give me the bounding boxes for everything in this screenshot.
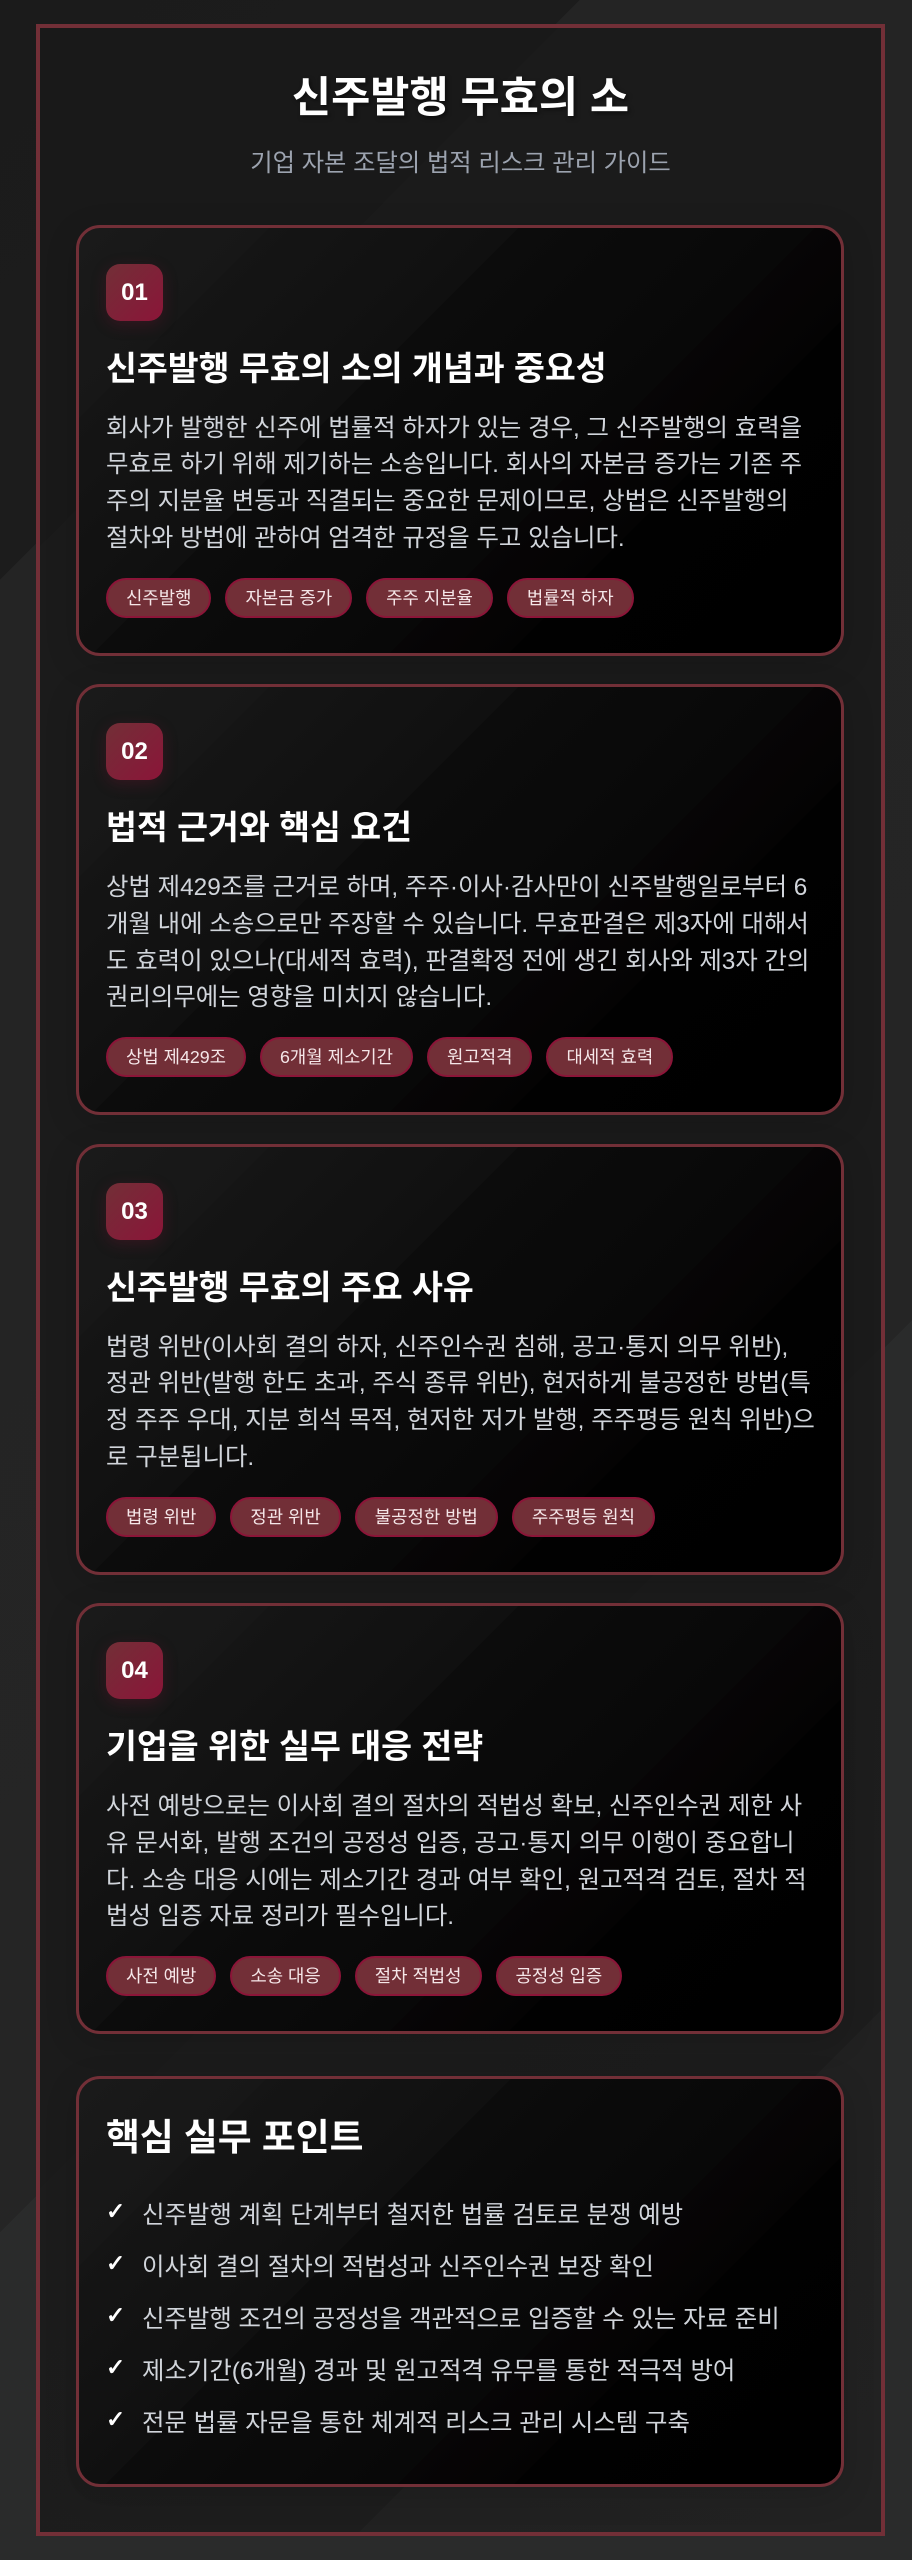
subtitle: 기업 자본 조달의 법적 리스크 관리 가이드 [250,150,671,177]
point 3 [106,2303,780,2333]
body text 03: 법령 위반(이사회 결의 하자, 신주인수권 침해, 공고·통지 의무 위반), [106,1334,788,1360]
body text 01: 회사가 발행한 신주에 법률적 하자가 있는 경우, 그 신주발행의 효력을 [106,414,802,442]
body text 01: 주의 지분율 변동과 직결되는 중요한 문제이므로, 상법은 신주발행의 [106,488,789,515]
tags 02: 대세적 효력 [566,1047,653,1067]
panel: key practice points: ✓ [106,2251,125,2277]
body text 01: 무효로 하기 위해 제기하는 소송입니다. 회사의 자본금 증가는 기존 주 [106,451,802,478]
tags 01 [106,578,634,618]
tags 03: 주주평등 원칙 [532,1506,635,1526]
tags 01: 법률적 하자 [527,588,614,608]
tags 04 [106,1956,622,1996]
badge 01: 01 [121,278,148,306]
body text 04 [106,1793,807,1930]
body text 04: 사전 예방으로는 이사회 결의 절차의 적법성 확보, 신주인수권 제한 사 [106,1793,802,1820]
panel: key practice points: ✓ [106,2199,125,2225]
body text 02: 도 효력이 있으나(대세적 효력), 판결확정 전에 생긴 회사와 제3자 간의 [106,948,809,975]
tags 03: 불공정한 방법 [375,1506,478,1526]
point 2 [106,2251,654,2281]
tags 03: 법령 위반 [126,1506,196,1526]
body text 03: 로 구분됩니다. [106,1444,254,1471]
panel: key practice points: 전문 법률 자문을 통한 체계적 리스크 관리 시스템 구축 [142,2410,690,2437]
badge 04: 04 [121,1657,148,1684]
panel: section 03 grounds [76,1144,844,1574]
tags 02: 원고적격 [447,1047,512,1067]
tags 04: 절차 적법성 [375,1966,462,1986]
body text 02 [106,874,809,1011]
badge 02 [106,723,163,780]
body text 01: 절차와 방법에 관하여 엄격한 규정을 두고 있습니다. [106,525,625,552]
summary heading: 핵심 실무 포인트 [106,2117,363,2158]
tags 02: 6개월 제소기간 [280,1047,393,1067]
panel: section 04 strategy [76,1603,844,2034]
body text 04: 유 문서화, 발행 조건의 공정성 입증, 공고·통지 의무 이행이 중요합니 [106,1830,795,1857]
heading 04: 기업을 위한 실무 대응 전략 [106,1729,483,1766]
badge 02: 02 [121,738,148,765]
heading 02: 법적 근거와 핵심 요건 [106,810,412,847]
body text 04: 다. 소송 대응 시에는 제소기간 경과 여부 확인, 원고적격 검토, 절차 적 [106,1867,807,1894]
badge 01 [106,264,163,320]
panel: key practice points: ✓ [106,2355,125,2381]
tags 04: 소송 대응 [250,1966,321,1986]
panel: key practice points: 제소기간(6개월) 경과 및 원고적격 유무를 통한 적극적 방어 [142,2358,735,2385]
title: 신주발행 무효의 소 [292,74,629,122]
badge 03 [106,1182,163,1240]
heading 01: 신주발행 무효의 소의 개념과 중요성 [106,350,607,388]
panel: section 02 legal basis [76,684,844,1115]
body text 02: 상법 제429조를 근거로 하며, 주주·이사·감사만이 신주발행일로부터 6 [106,874,807,901]
point 1 [106,2199,683,2229]
tags 04: 사전 예방 [126,1966,196,1986]
body text 01 [106,414,802,552]
tags 01: 자본금 증가 [245,588,332,608]
tags 01: 주주 지분율 [386,588,473,608]
panel: section 01 concept [76,224,844,656]
body text 04: 법성 입증 자료 정리가 필수입니다. [106,1903,454,1930]
body text 03: 정관 위반(발행 한도 초과, 주식 종류 위반), 현저하게 불공정한 방법(특 [106,1370,811,1397]
badge 03: 03 [121,1198,148,1224]
panel: key practice points: ✓ [106,2303,125,2329]
tags 04: 공정성 입증 [516,1966,602,1986]
tags 03 [106,1497,655,1537]
point 5 [106,2407,690,2437]
body text 02: 권리의무에는 영향을 미치지 않습니다. [106,984,492,1011]
panel: key practice points: 신주발행 계획 단계부터 철저한 법률 검토로 분쟁 예방 [142,2202,683,2229]
panel: key practice points: 신주발행 조건의 공정성을 객관적으로 입증할 수 있는 자료 준비 [142,2306,780,2333]
tags 02: 상법 제429조 [126,1047,226,1067]
panel: key practice points: ✓ [106,2407,125,2433]
heading 03: 신주발행 무효의 주요 사유 [106,1270,474,1306]
body text 03: 정 주주 우대, 지분 희석 목적, 현저한 저가 발행, 주주평등 원칙 위반)으 [106,1407,815,1434]
body text 03 [106,1334,815,1471]
tags 02 [106,1037,673,1077]
point 4 [106,2355,735,2385]
tags 01: 신주발행 [126,588,191,608]
tags 03: 정관 위반 [250,1506,321,1526]
panel: key practice points [76,2076,844,2487]
panel: key practice points: 이사회 결의 절차의 적법성과 신주인수권 보장 확인 [142,2254,654,2281]
badge 04 [106,1642,163,1699]
body text 02: 개월 내에 소송으로만 주장할 수 있습니다. 무효판결은 제3자에 대해서 [106,911,809,938]
